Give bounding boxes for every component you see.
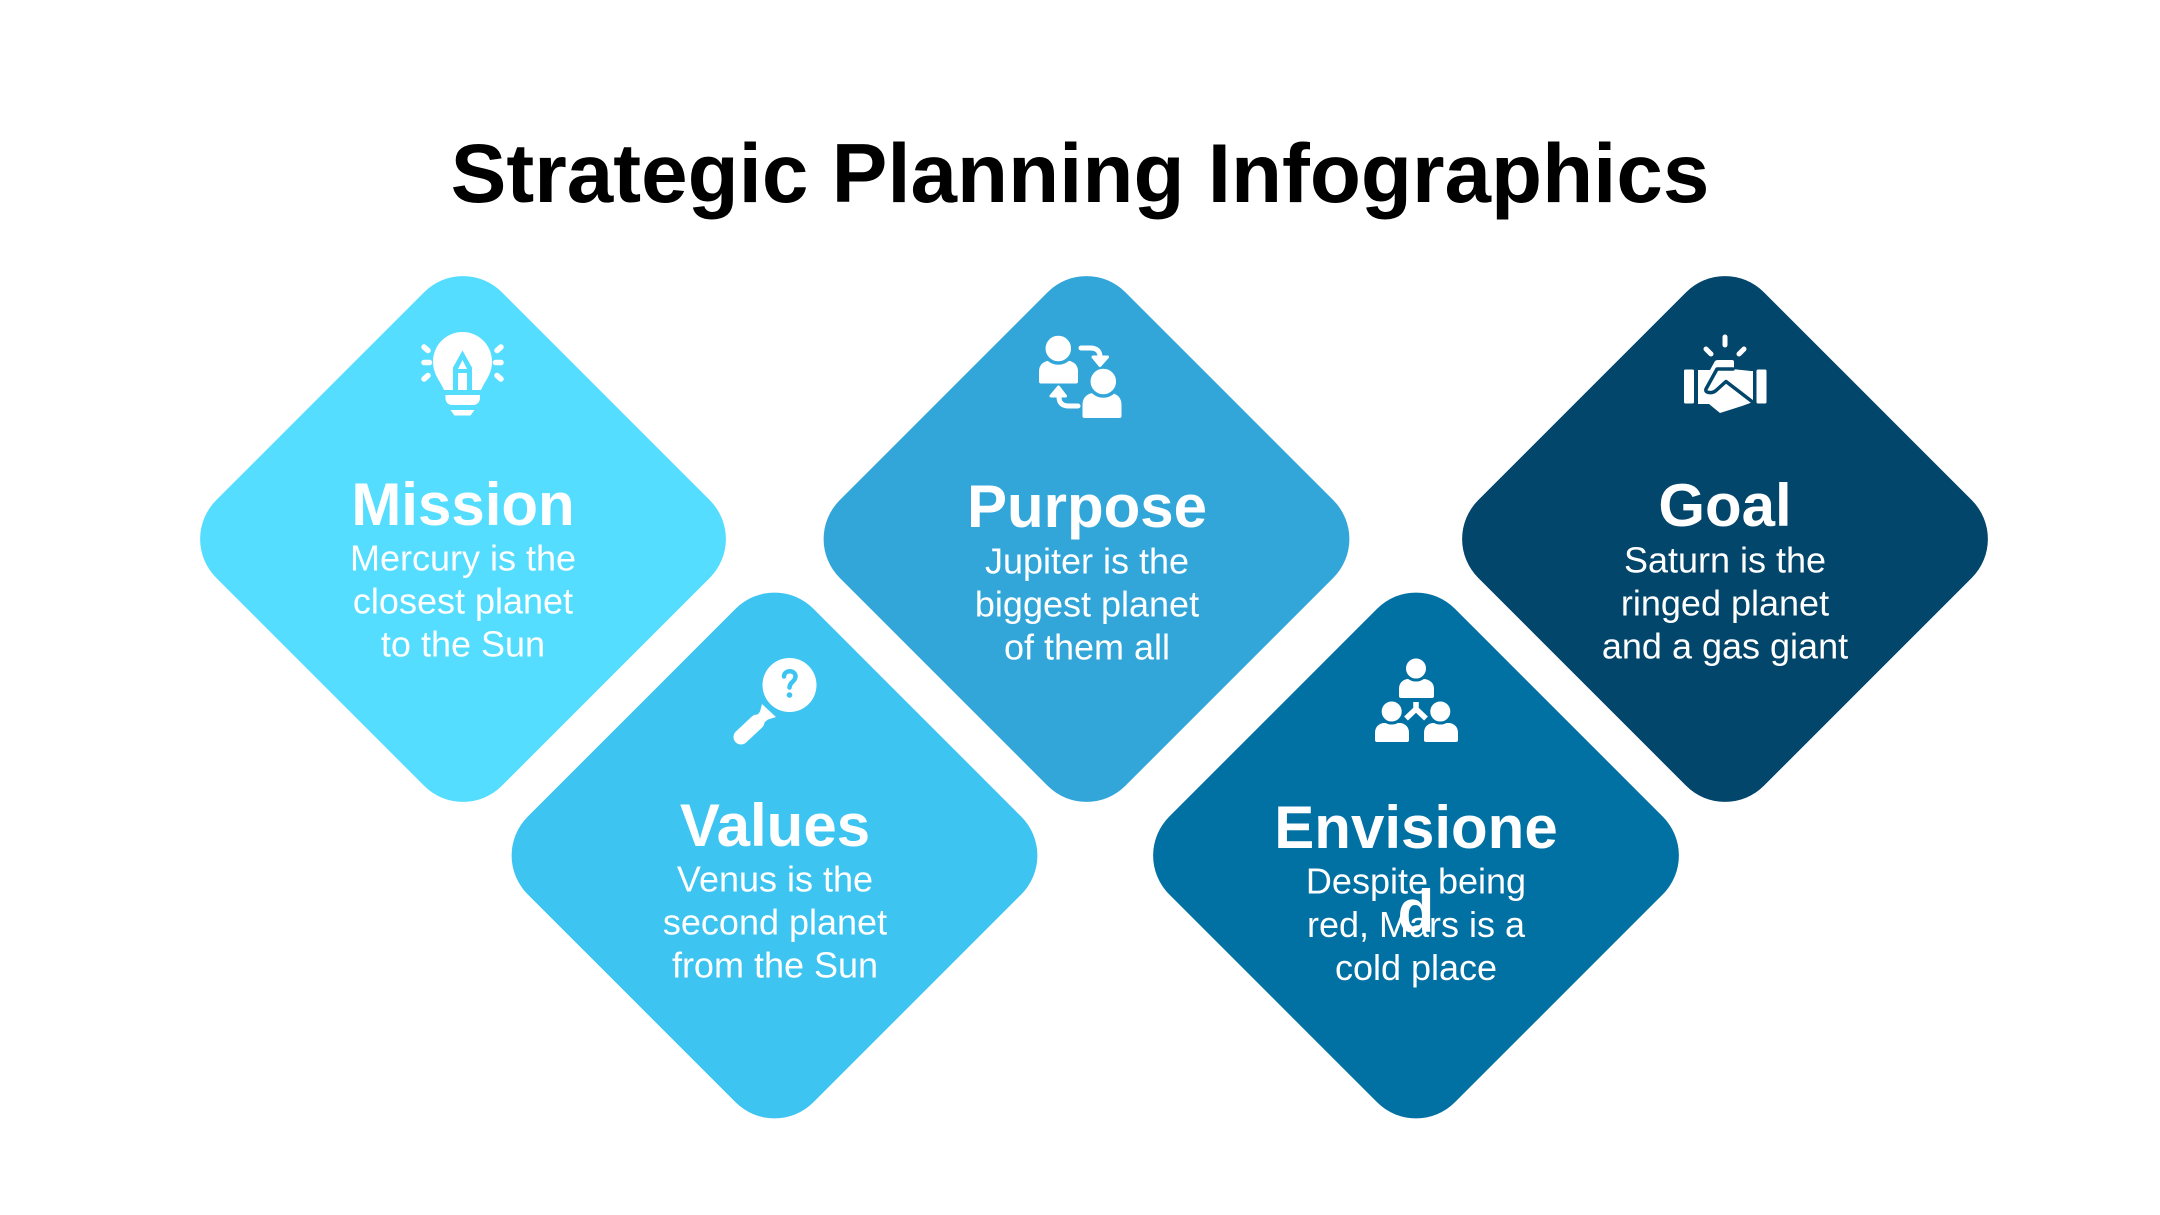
description: Values: Venus is the: [677, 859, 873, 900]
panel: Envisioned: [1130, 570, 1702, 1141]
description: Purpose: of them all: [1004, 626, 1170, 667]
description: Values: from the Sun: [672, 945, 878, 986]
heading: Values: Values: [680, 792, 870, 859]
icon: team hierarchy: [1375, 657, 1458, 742]
description: Goal: ringed planet: [1621, 582, 1829, 623]
description: Envisioned: cold place: [1335, 947, 1497, 988]
diamond background: Envisioned: [1130, 570, 1702, 1141]
panel: Purpose: [801, 253, 1372, 825]
description: Goal: Saturn is the: [1624, 539, 1826, 580]
icon: light bulb with pencil: [424, 332, 501, 416]
icon: two people exchanging: [1039, 334, 1122, 418]
heading: Goal: Goal: [1658, 472, 1792, 539]
description: Mission: closest planet: [353, 580, 573, 621]
title: Strategic Planning Infographics: [451, 126, 1709, 220]
description: Goal: and a gas giant: [1602, 625, 1848, 666]
description: Purpose: biggest planet: [975, 583, 1199, 624]
diamond background: Mission: [177, 253, 749, 825]
description: Mission: to the Sun: [381, 623, 545, 664]
description: Mission: Mercury is the: [350, 537, 576, 578]
description: Envisioned: Despite being: [1306, 860, 1526, 902]
heading: Mission: Mission: [351, 471, 575, 538]
icon: handshake: [1684, 337, 1766, 413]
diamond background: Purpose: [801, 253, 1372, 825]
heading: Purpose: Purpose: [967, 473, 1207, 540]
heading: Envisioned (wrapped): d: [1398, 878, 1434, 945]
panel: Goal: [1439, 253, 2011, 825]
description: Purpose: Jupiter is the: [985, 540, 1189, 581]
diamond background: Goal: [1439, 253, 2011, 825]
diamond background: Values: [489, 570, 1060, 1141]
panel: Mission: [177, 253, 749, 825]
description: Values: second planet: [663, 902, 887, 943]
heading: Envisioned (wrapped): Envisione: [1274, 794, 1558, 861]
panel: Values: [489, 570, 1060, 1141]
icon: magnifier with question mark: [741, 658, 816, 737]
description: Envisioned: red, Mars is a: [1307, 904, 1526, 945]
